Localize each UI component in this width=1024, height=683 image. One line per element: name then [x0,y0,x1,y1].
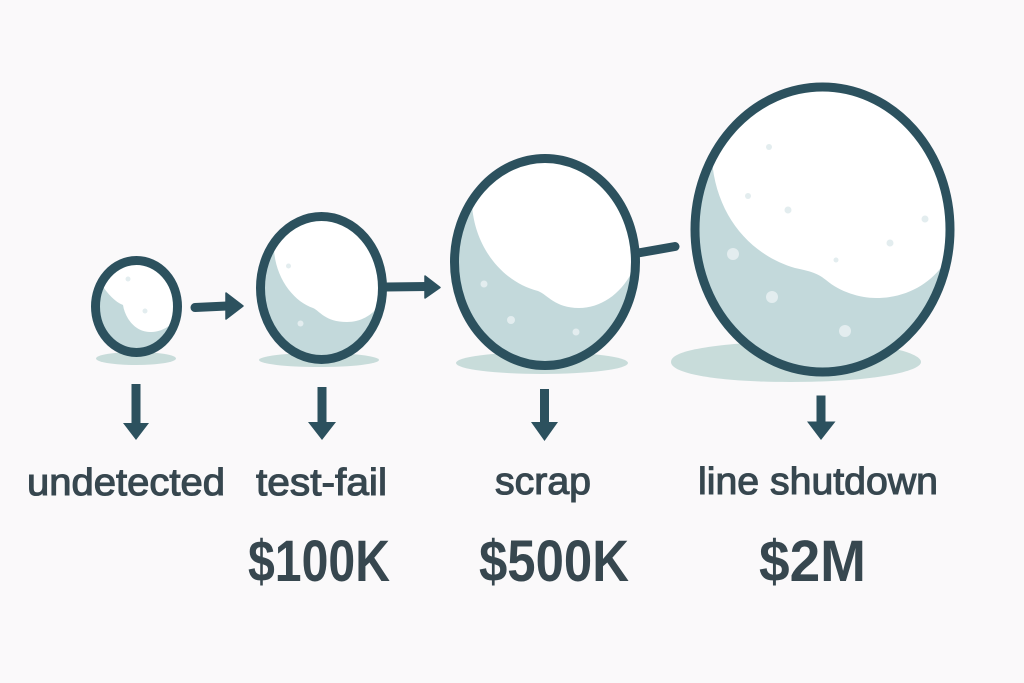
amount: $500K: $500K [479,529,629,594]
arrow down: scrap [531,389,558,441]
amount: $100K: $100K [248,529,390,594]
arrow: test-fail to scrap [386,276,440,298]
label: test-fail: test-fail [256,462,387,504]
arrow: undetected to test-fail [195,293,243,319]
amount: $2M: $2M [759,529,866,594]
arrow down: line shutdown [807,396,836,440]
label: undetected: undetected [27,462,225,504]
arrow down: test-fail [308,387,336,440]
snowball 4: line shutdown [671,80,960,382]
snowball 1: undetected [96,250,185,365]
arrow down: undetected [123,384,149,440]
label: scrap: scrap [495,461,591,503]
snowball 3: scrap [450,150,645,374]
snowball 2: test-fail [255,205,390,367]
connector: scrap to line shutdown [638,246,675,253]
label: line shutdown: line shutdown [698,461,938,503]
